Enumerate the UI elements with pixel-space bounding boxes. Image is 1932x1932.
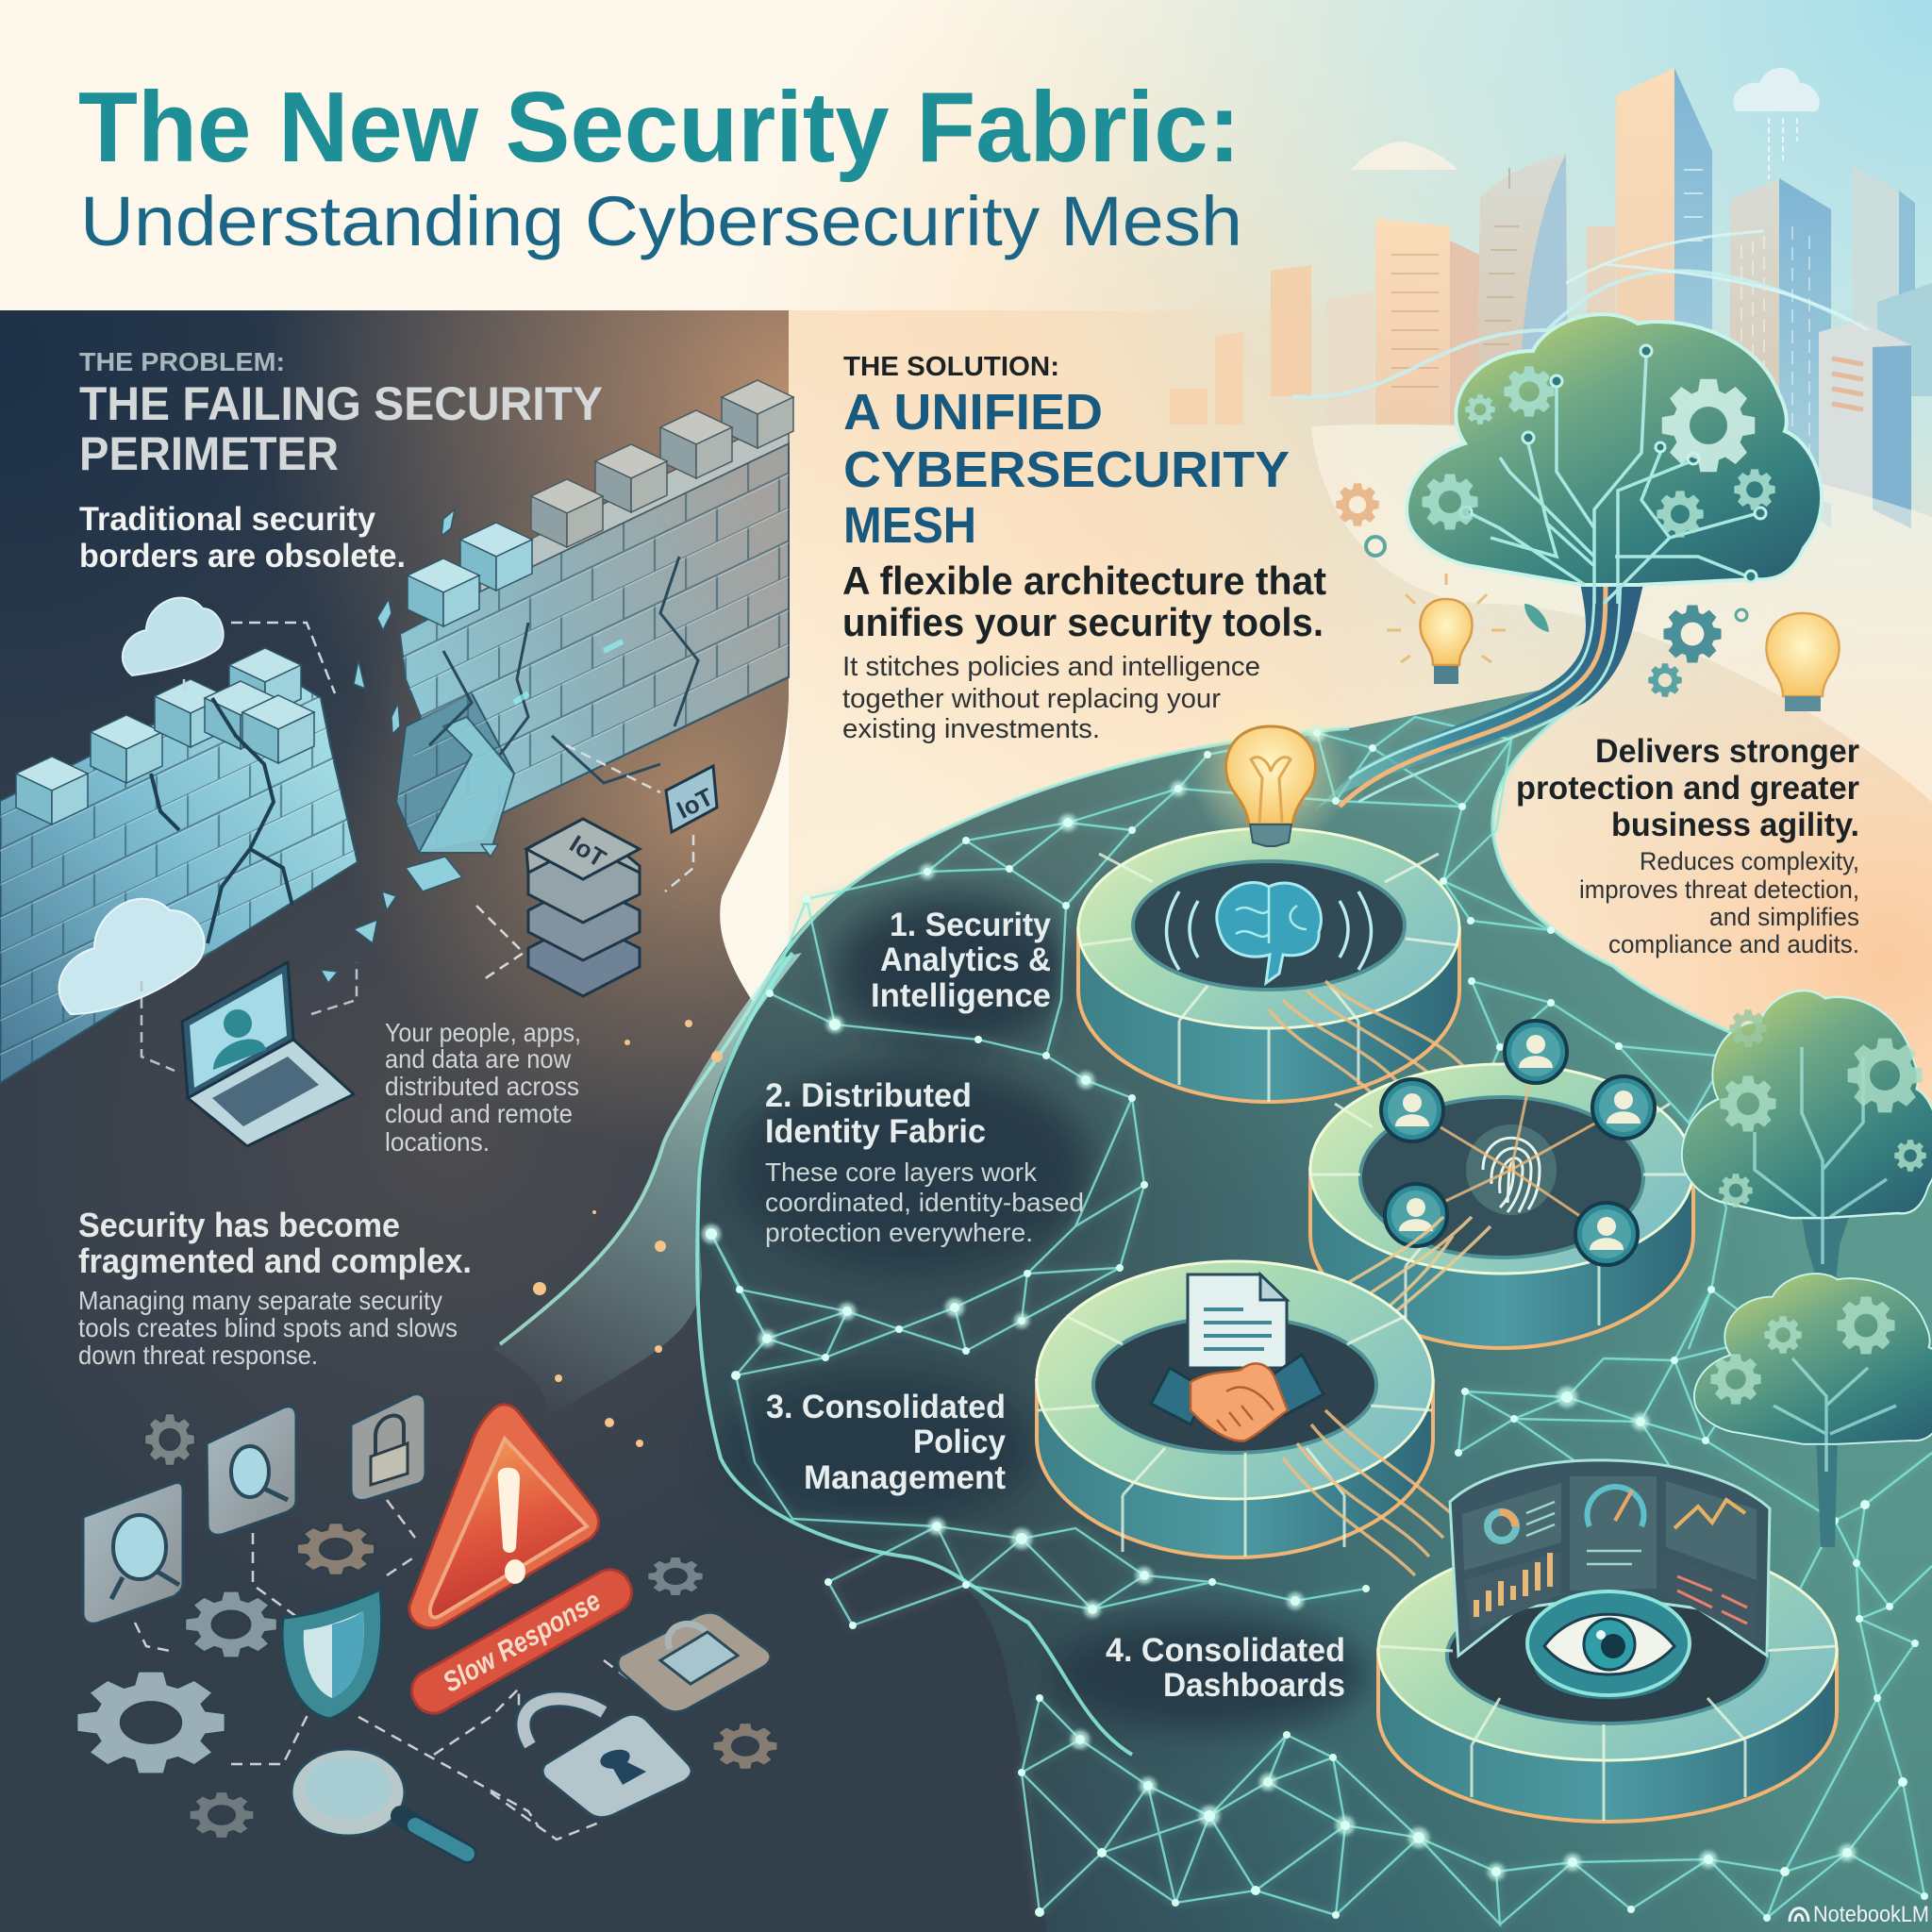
flow lines: ring 2 to ring 3: [1302, 1217, 1491, 1368]
icon: IoT tag: [476, 745, 718, 981]
connectors to people: [1412, 1052, 1624, 1234]
text block: stronger protection: Delivers stronger: [1595, 733, 1859, 770]
dashed connectors: [135, 1500, 641, 1840]
icon: shield: [282, 1590, 382, 1719]
text block: obsolete borders: [79, 501, 406, 575]
illustration: crumbling perimeter wall: [0, 380, 793, 1146]
label: consolidated policy management: 3. Consolidated: [766, 1389, 1006, 1425]
text block: flexible architecture: existing investments.: [842, 714, 1100, 744]
label: distributed identity fabric: coordinated, identity-based: [765, 1188, 1084, 1217]
text block: flexible architecture: [842, 558, 1326, 744]
magnifier tile medium: [207, 1407, 296, 1535]
icon: brain: [1166, 883, 1372, 983]
icon: small light bulb: [1387, 574, 1506, 684]
heading: the solution: MESH: [843, 497, 976, 554]
heading: the solution: THE SOLUTION:: [843, 352, 1059, 382]
icon: warning triangle: [409, 1405, 599, 1628]
tree crown: [1407, 314, 1822, 585]
heading: the solution: [843, 352, 1290, 554]
text block: fragmented security: tools creates blind spots and slows: [78, 1313, 458, 1342]
icon: flat lock tile: [618, 1612, 771, 1712]
gears cluster: [76, 1413, 777, 1839]
lock tile: [351, 1394, 425, 1500]
heading: the problem: THE PROBLEM:: [79, 347, 285, 376]
icon: IoT tag: IoT: [672, 782, 718, 824]
text block: stronger protection: Reduces complexity,: [1640, 847, 1859, 875]
icon: large cloud: [59, 899, 205, 1014]
icon: right light bulb: [1766, 613, 1840, 711]
heading: the solution: CYBERSECURITY: [843, 441, 1290, 498]
icon: fingerprint: [1466, 1124, 1557, 1215]
text block: stronger protection: improves threat detection,: [1579, 875, 1859, 904]
crown circuitry: [1422, 345, 1775, 604]
icon: handshake: [1151, 1355, 1324, 1441]
icon: IoT server stack: [526, 819, 640, 996]
text block: distributed people and data: Your people, apps,: [385, 1018, 581, 1047]
flying debris: [321, 509, 498, 983]
label: security analytics and intelligence: Analytics &: [880, 941, 1051, 978]
icon: laptop with user: [142, 962, 357, 1146]
icon: policy document: [1188, 1274, 1287, 1368]
label: distributed identity fabric: Identity Fabric: [765, 1113, 986, 1150]
panel: problem dark background: [0, 310, 1226, 1932]
text block: stronger protection: business agility.: [1611, 807, 1859, 843]
heading: the solution: A UNIFIED: [843, 384, 1103, 441]
text block: stronger protection: [1516, 733, 1859, 958]
title: The New Security Fabric:: [78, 72, 1241, 183]
label: distributed identity fabric: 2. Distributed: [765, 1077, 972, 1114]
text block: flexible architecture: It stitches policies and intelligence: [842, 652, 1260, 682]
drifting sparks: [533, 1020, 723, 1447]
icon: padlock: [524, 1699, 691, 1818]
text block: distributed people and data: distributed across: [385, 1072, 579, 1101]
text block: fragmented security: [78, 1206, 472, 1370]
label: consolidated dashboards: [1106, 1632, 1345, 1704]
title: Understanding Cybersecurity Mesh: [80, 182, 1242, 260]
ring 1: security analytics and intelligence: [1078, 828, 1459, 1102]
label: security analytics and intelligence: 1. Security: [890, 907, 1052, 943]
label: consolidated dashboards: Dashboards: [1163, 1667, 1345, 1704]
text block: distributed people and data: locations.: [385, 1127, 490, 1157]
ring 3: consolidated policy management: [1037, 1261, 1433, 1557]
label: consolidated dashboards: 4. Consolidated: [1106, 1632, 1345, 1669]
text block: fragmented security: fragmented and complex.: [78, 1241, 472, 1280]
illustration: circuit tree: [1313, 314, 1840, 811]
label: security analytics and intelligence: Intelligence: [871, 977, 1051, 1014]
text block: distributed people and data: [385, 1018, 581, 1157]
label: distributed identity fabric: [765, 1077, 1084, 1247]
heading: the problem: [79, 347, 603, 480]
left wall segment: [0, 648, 358, 1083]
side tree: lower: [1694, 1274, 1932, 1547]
text block: flexible architecture: A flexible architecture that: [842, 558, 1326, 603]
illustration: fragmented security tools: [76, 1020, 777, 1854]
magnifier tile large: [83, 1482, 183, 1624]
label: consolidated policy management: [766, 1389, 1007, 1496]
text block: distributed people and data: and data are now: [385, 1044, 572, 1074]
ring 2: distributed identity fabric: [1310, 1021, 1693, 1348]
flow lines: ring 3 to ring 4: [1283, 1410, 1457, 1575]
text block: stronger protection: protection and greater: [1516, 770, 1859, 807]
floating gears: [1336, 483, 1747, 697]
ribbon: translucent band flowing out of the alert: [492, 679, 1748, 1755]
right wall segment: [396, 380, 793, 853]
icon: magnifying glass: [291, 1749, 467, 1854]
text block: flexible architecture: together without replacing your: [842, 684, 1221, 714]
text block: fragmented security: Security has become: [78, 1206, 400, 1244]
text block: fragmented security: Managing many separate security: [78, 1286, 442, 1315]
panel: security mesh fabric ground: [697, 679, 1932, 1932]
text block: stronger protection: compliance and audits.: [1608, 930, 1859, 958]
badge: slow response: Slow Response: [438, 1585, 606, 1699]
ring 4: consolidated dashboards: [1378, 1460, 1837, 1822]
text block: distributed people and data: cloud and remote: [385, 1099, 573, 1128]
icon: dashboard screen: [1450, 1460, 1770, 1656]
label: distributed identity fabric: These core layers work: [765, 1158, 1038, 1187]
label: security analytics and intelligence: [871, 907, 1052, 1014]
icon: small cloud: [123, 598, 335, 693]
dark blobs behind labels: [717, 896, 1368, 1731]
icon: eye: [1527, 1591, 1690, 1699]
label: distributed identity fabric: protection everywhere.: [765, 1218, 1033, 1247]
tree trunk: [1313, 566, 1649, 811]
people nodes: [1381, 1021, 1655, 1265]
heading: the problem: PERIMETER: [79, 427, 339, 480]
icon: glowing light bulb: [1191, 693, 1351, 854]
side tree: upper: [1682, 991, 1932, 1292]
flow lines: ring 1 to ring 2: [1269, 981, 1472, 1123]
label: consolidated policy management: Policy: [913, 1424, 1007, 1460]
text block: obsolete borders: borders are obsolete.: [79, 538, 406, 575]
illustration: future city skyline: [1170, 68, 1932, 802]
text block: stronger protection: and simplifies: [1709, 903, 1859, 931]
text block: obsolete borders: Traditional security: [79, 501, 376, 538]
badge: slow response: [405, 1562, 639, 1721]
heading: the problem: THE FAILING SECURITY: [79, 377, 603, 430]
mesh network of connected nodes: [702, 717, 1932, 1924]
text block: fragmented security: down threat response.: [78, 1341, 318, 1370]
label: consolidated policy management: Management: [804, 1459, 1006, 1496]
icon: IoT server stack: IoT: [565, 829, 611, 873]
title: [78, 72, 1242, 260]
text block: flexible architecture: unifies your security tools.: [842, 600, 1324, 644]
